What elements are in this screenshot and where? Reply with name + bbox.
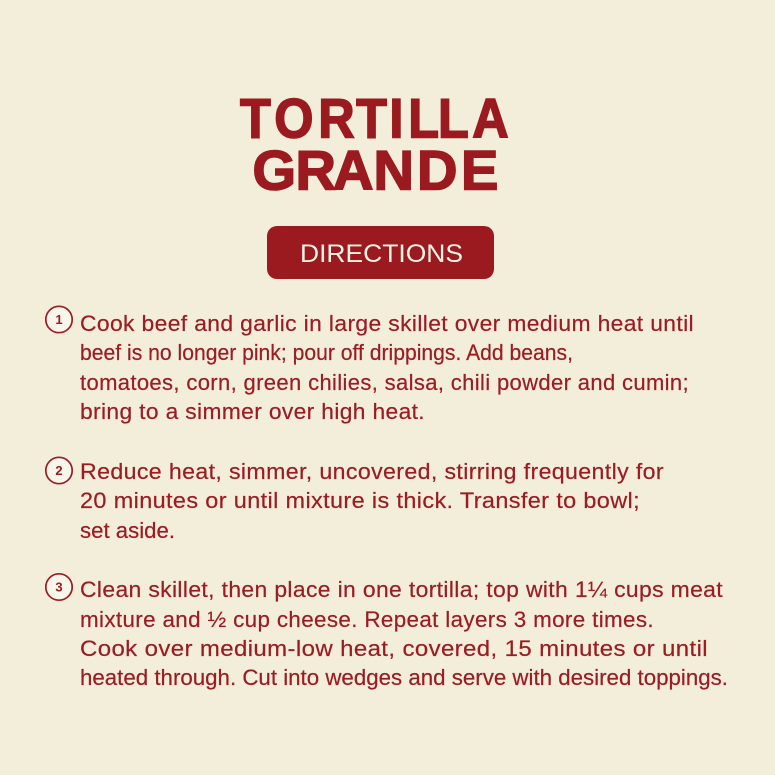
step 1 text: bring to a simmer over high heat. — [80, 399, 425, 424]
step 2 text — [80, 459, 664, 543]
step 1 number icon — [46, 306, 72, 333]
step 3 text: heated through. Cut into wedges and serve with desired toppings. — [80, 665, 728, 690]
directions badge — [267, 226, 494, 279]
step 3 — [46, 574, 728, 690]
step 1 text: beef is no longer pink; pour off drippings. Add beans, — [80, 340, 573, 365]
step 3 number icon: 3 — [55, 580, 63, 594]
step 1 number icon: 1 — [55, 312, 63, 327]
step 3 text — [80, 577, 728, 690]
step 3 text: Cook over medium-low heat, covered, 15 minutes or until — [80, 636, 708, 661]
step 3 number icon — [46, 574, 72, 600]
step 2 number icon: 2 — [55, 463, 63, 478]
step 3 text: mixture and ½ cup cheese. Repeat layers 3 more times. — [80, 607, 654, 632]
title: GRANDE — [252, 138, 498, 202]
step 2 number icon — [46, 457, 72, 484]
step 1 text — [80, 311, 694, 424]
title — [240, 88, 509, 202]
title: TORTILLA — [240, 88, 509, 150]
step 2 text: 20 minutes or until mixture is thick. Transfer to bowl; — [80, 488, 640, 513]
step 1 text: tomatoes, corn, green chilies, salsa, chili powder and cumin; — [80, 370, 689, 395]
step 2 — [46, 457, 664, 543]
step 2 text: set aside. — [80, 518, 175, 543]
directions badge: DIRECTIONS — [300, 240, 463, 268]
step 1 text: Cook beef and garlic in large skillet over medium heat until — [80, 311, 694, 336]
step 2 text: Reduce heat, simmer, uncovered, stirring frequently for — [80, 459, 664, 484]
step 3 text: Clean skillet, then place in one tortilla; top with 1¼ cups meat — [80, 577, 723, 602]
step 1 — [46, 306, 694, 424]
